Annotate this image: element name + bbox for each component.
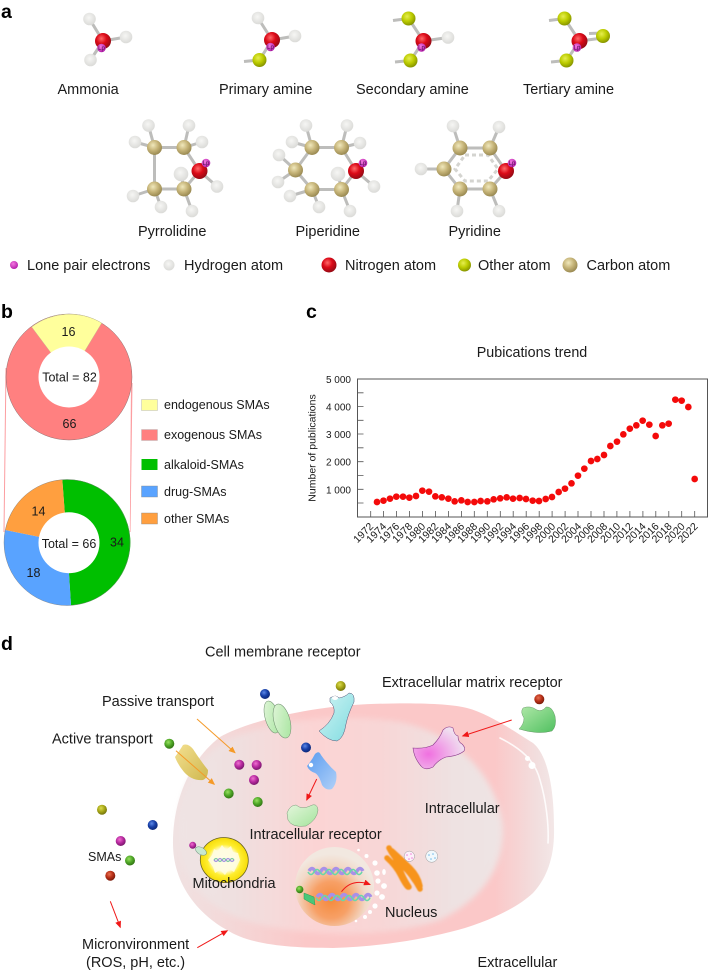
scatter chart: publications: 1996 <box>507 521 532 546</box>
panel label c: c <box>306 301 317 323</box>
molecule: primary amine <box>244 12 301 67</box>
label: primary amine: Primary amine <box>219 82 312 98</box>
molecule: piperidine: Lp <box>360 161 367 167</box>
nucleus <box>295 847 374 926</box>
scatter chart: publications: 1976 <box>377 521 402 546</box>
molecule: secondary amine: Lp <box>418 46 425 52</box>
donut chart: total 66: 18 <box>27 566 40 580</box>
panel d text labels: Intracellular receptor <box>250 827 382 843</box>
donut chart: total 82: Total = 82 <box>42 370 97 384</box>
scatter chart: publications: 2008 <box>585 521 610 546</box>
donut legend: exogenous SMAs <box>164 428 262 442</box>
donut chart: total 82: 16 <box>62 325 75 339</box>
molecule: pyridine: Lp <box>509 161 516 167</box>
panel d text labels: SMAs <box>88 850 121 864</box>
label: pyridine: Pyridine <box>448 224 501 240</box>
scatter chart: publications: 2020 <box>663 521 688 546</box>
atom legend: Hydrogen atom <box>184 258 283 274</box>
receptor: aqua cell membrane receptor <box>319 693 354 741</box>
scatter chart: publications: 1 000 <box>326 485 351 496</box>
panel d text labels: Micronvironment <box>82 937 189 953</box>
panel d text labels: Active transport <box>52 732 153 748</box>
donut chart: total 66: 34 <box>110 536 124 550</box>
scatter chart: publications: 1974 <box>364 521 389 546</box>
scatter chart: publications: 2018 <box>650 521 675 546</box>
label: tertiary amine: Tertiary amine <box>523 82 614 98</box>
molecule: tertiary amine: Lp <box>574 46 581 52</box>
panel d text labels: Passive transport <box>102 694 214 710</box>
scatter chart: publications: 1998 <box>520 521 545 546</box>
atom legend: Nitrogen atom <box>345 258 436 274</box>
scatter chart: publications: 1980 <box>403 521 428 546</box>
scatter chart: publications: 3 000 <box>326 430 351 441</box>
atom legend: Other atom <box>478 258 551 274</box>
molecule: ammonia: Lp <box>98 46 105 52</box>
scatter chart: publications: 1988 <box>455 521 480 546</box>
scatter chart: publications: 2002 <box>546 521 571 546</box>
atom legend: Lone pair electrons <box>27 258 150 274</box>
panel d text labels: Extracellular matrix receptor <box>382 675 563 691</box>
donut legend: drug-SMAs <box>164 485 227 499</box>
small molecules <box>97 681 544 893</box>
scatter chart: publications: 1994 <box>494 521 519 546</box>
receptor: green extracellular <box>519 707 556 733</box>
donut chart: total 66: Total = 66 <box>42 537 96 551</box>
molecule: tertiary amine <box>549 12 610 68</box>
donut legend: alkaloid-SMAs <box>164 458 244 472</box>
receptor: pink extracellular matrix target <box>413 727 465 769</box>
scatter chart: publications: 1978 <box>390 521 415 546</box>
scatter chart: publications: 2 000 <box>326 458 351 469</box>
connector lines between donuts <box>4 368 132 532</box>
scatter chart: publications: 1972 <box>351 521 376 546</box>
panel label d: d <box>1 633 13 655</box>
donut chart: total 66: 14 <box>32 504 45 518</box>
panel label a: a <box>1 1 12 23</box>
scatter chart: publications: 1992 <box>481 521 506 546</box>
scatter chart: publications: 2012 <box>611 521 636 546</box>
golgi apparatus <box>387 848 420 889</box>
donut legend <box>142 398 270 526</box>
label: secondary amine: Secondary amine <box>356 82 469 98</box>
panel d text labels: Intracellular <box>425 801 500 817</box>
molecule: pyrrolidine <box>127 119 223 217</box>
scatter chart: publications: 2022 <box>676 521 701 546</box>
scatter chart: publications: 2014 <box>624 521 649 546</box>
donut chart: total 82 <box>6 314 132 440</box>
scatter chart: publications <box>306 375 708 546</box>
label: ammonia: Ammonia <box>58 82 120 98</box>
panel d text labels: Mitochondria <box>192 876 276 892</box>
mitochondria <box>194 834 252 886</box>
scatter chart: publications: 2004 <box>559 521 584 546</box>
transporter: yellow <box>175 744 208 780</box>
scatter chart: publications: 5 000 <box>326 375 351 386</box>
donut chart: total 82: 66 <box>63 417 76 431</box>
atom legend: Carbon atom <box>586 258 670 274</box>
scatter chart: publications: 4 000 <box>326 402 351 414</box>
scatter chart: publications: 1990 <box>468 521 493 546</box>
vesicle dots around nucleus <box>355 849 387 922</box>
donut legend: other SMAs <box>164 512 229 526</box>
panel label b: b <box>1 301 13 323</box>
molecule: pyrrolidine: Lp <box>203 161 210 167</box>
panel d text labels: Nucleus <box>385 905 437 921</box>
scatter chart: publications: 1986 <box>442 521 467 546</box>
receptor: blue <box>307 752 336 790</box>
scatter chart: publications: Number of publications <box>306 394 318 502</box>
arrows <box>110 719 512 948</box>
vesicles <box>404 850 438 862</box>
scatter chart: publications: 2010 <box>598 521 623 546</box>
receptor: green membrane channel <box>261 699 294 740</box>
cell body <box>173 703 554 948</box>
molecule: secondary amine <box>393 12 454 68</box>
atom legend <box>10 258 670 274</box>
molecule: ammonia <box>83 13 132 66</box>
chart title: Pubications trend <box>477 345 587 361</box>
panel d text labels: Cell membrane receptor <box>205 644 361 660</box>
label: piperidine: Piperidine <box>296 224 360 240</box>
receptor: intracellular green <box>287 805 318 826</box>
molecule: piperidine <box>272 119 380 217</box>
label: pyrrolidine: Pyrrolidine <box>138 224 206 240</box>
scatter chart: publications: 1984 <box>429 521 454 546</box>
molecule: pyridine <box>415 120 516 217</box>
panel d text labels <box>52 644 563 970</box>
molecule: primary amine: Lp <box>267 45 274 51</box>
donut chart: total 66 <box>4 479 130 606</box>
donut legend: endogenous SMAs <box>164 398 270 412</box>
scatter chart: publications: 2016 <box>637 521 662 546</box>
scatter chart: publications: 1982 <box>416 521 441 546</box>
scatter chart: publications: 2006 <box>572 521 597 546</box>
scatter chart: publications: 2000 <box>533 521 558 546</box>
